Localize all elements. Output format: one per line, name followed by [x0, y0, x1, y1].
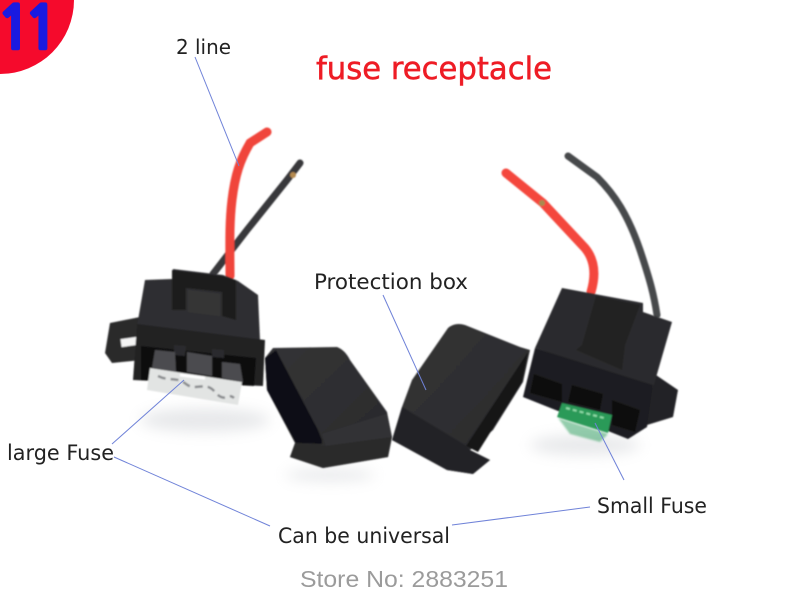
badge: number 11 [0, 0, 74, 74]
right protection cover [392, 324, 530, 474]
title: fuse receptacle [316, 51, 552, 87]
label: 2 line: 2 line [176, 35, 231, 59]
right connector ear [647, 373, 678, 425]
watermark: store number: Store No: 2883251 [300, 566, 508, 592]
left connector wires [213, 132, 300, 276]
right connector wires [506, 156, 657, 315]
left connector body [137, 269, 260, 340]
left connector front frame [133, 324, 265, 386]
left connector ear [105, 317, 142, 363]
left connector with large fuse [105, 269, 265, 405]
label: Small Fuse: Small Fuse [597, 494, 707, 518]
left connector clip [172, 270, 236, 320]
callout leader lines [112, 57, 624, 526]
large clear fuse [147, 350, 243, 405]
right connector body [535, 288, 672, 388]
label: Can be universal: Can be universal [278, 524, 450, 548]
label: Protection box: Protection box [314, 270, 468, 294]
right connector with small fuse [523, 288, 678, 442]
right connector front frame [523, 348, 653, 439]
small green fuse [557, 403, 612, 442]
right connector clip [576, 296, 640, 370]
label: large Fuse: large Fuse [7, 441, 114, 465]
left protection cover [265, 347, 392, 468]
soft shadows under parts [140, 408, 640, 481]
